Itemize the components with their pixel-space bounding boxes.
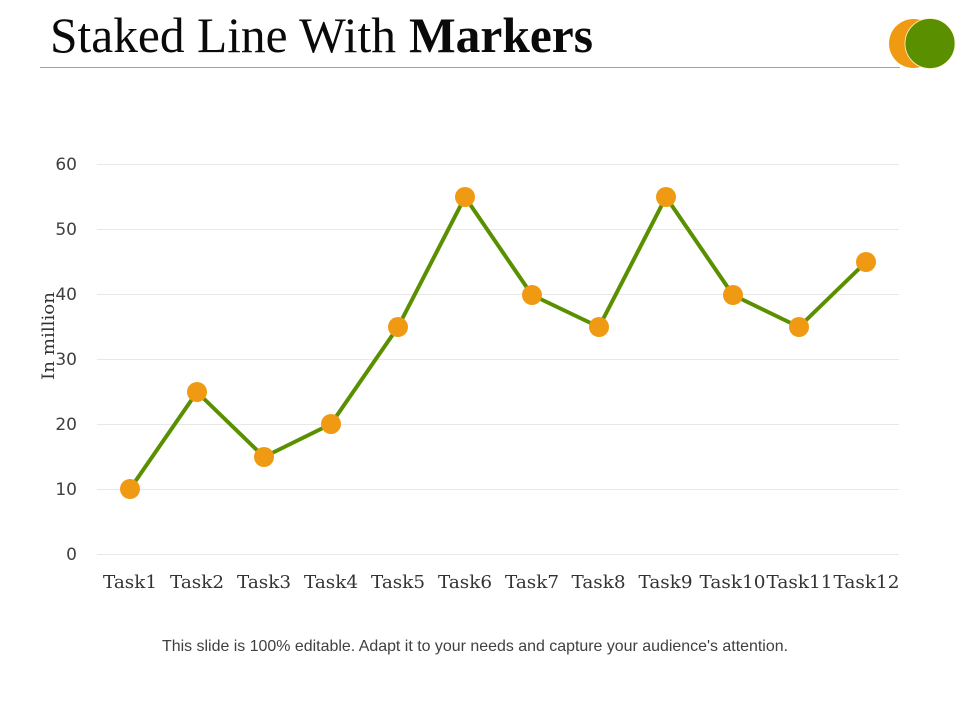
y-axis labels: 10 (55, 480, 77, 500)
data markers (120, 187, 876, 499)
y-axis title: In million (39, 292, 59, 380)
data line (130, 197, 866, 489)
x-axis labels: Task9 (638, 572, 692, 593)
x-axis labels: Task8 (572, 572, 626, 593)
icon: overlapping circles (889, 18, 955, 68)
title: Staked Line With (50, 7, 396, 63)
title (50, 7, 593, 63)
title: Markers (409, 7, 593, 63)
x-axis labels: Task12 (834, 572, 900, 593)
x-axis labels: Task7 (505, 572, 559, 593)
x-axis labels: Task5 (371, 572, 425, 593)
y-axis labels (55, 155, 77, 565)
line chart (39, 155, 900, 593)
y-axis labels: 20 (55, 415, 77, 435)
y-axis labels: 40 (55, 285, 77, 305)
x-axis labels: Task1 (103, 572, 157, 593)
y-axis labels: 50 (55, 220, 77, 240)
x-axis labels: Task3 (237, 572, 291, 593)
y-axis labels: 0 (66, 545, 77, 565)
x-axis labels: Task4 (304, 572, 358, 593)
caption: This slide is 100% editable. Adapt it to your needs and capture your audience's attention. (162, 638, 788, 655)
y-axis labels: 30 (55, 350, 77, 370)
x-axis labels: Task10 (700, 572, 766, 593)
x-axis labels: Task6 (438, 572, 492, 593)
y-axis labels: 60 (55, 155, 77, 175)
x-axis labels: Task2 (170, 572, 224, 593)
x-axis labels (103, 572, 900, 593)
x-axis labels: Task11 (766, 572, 832, 593)
